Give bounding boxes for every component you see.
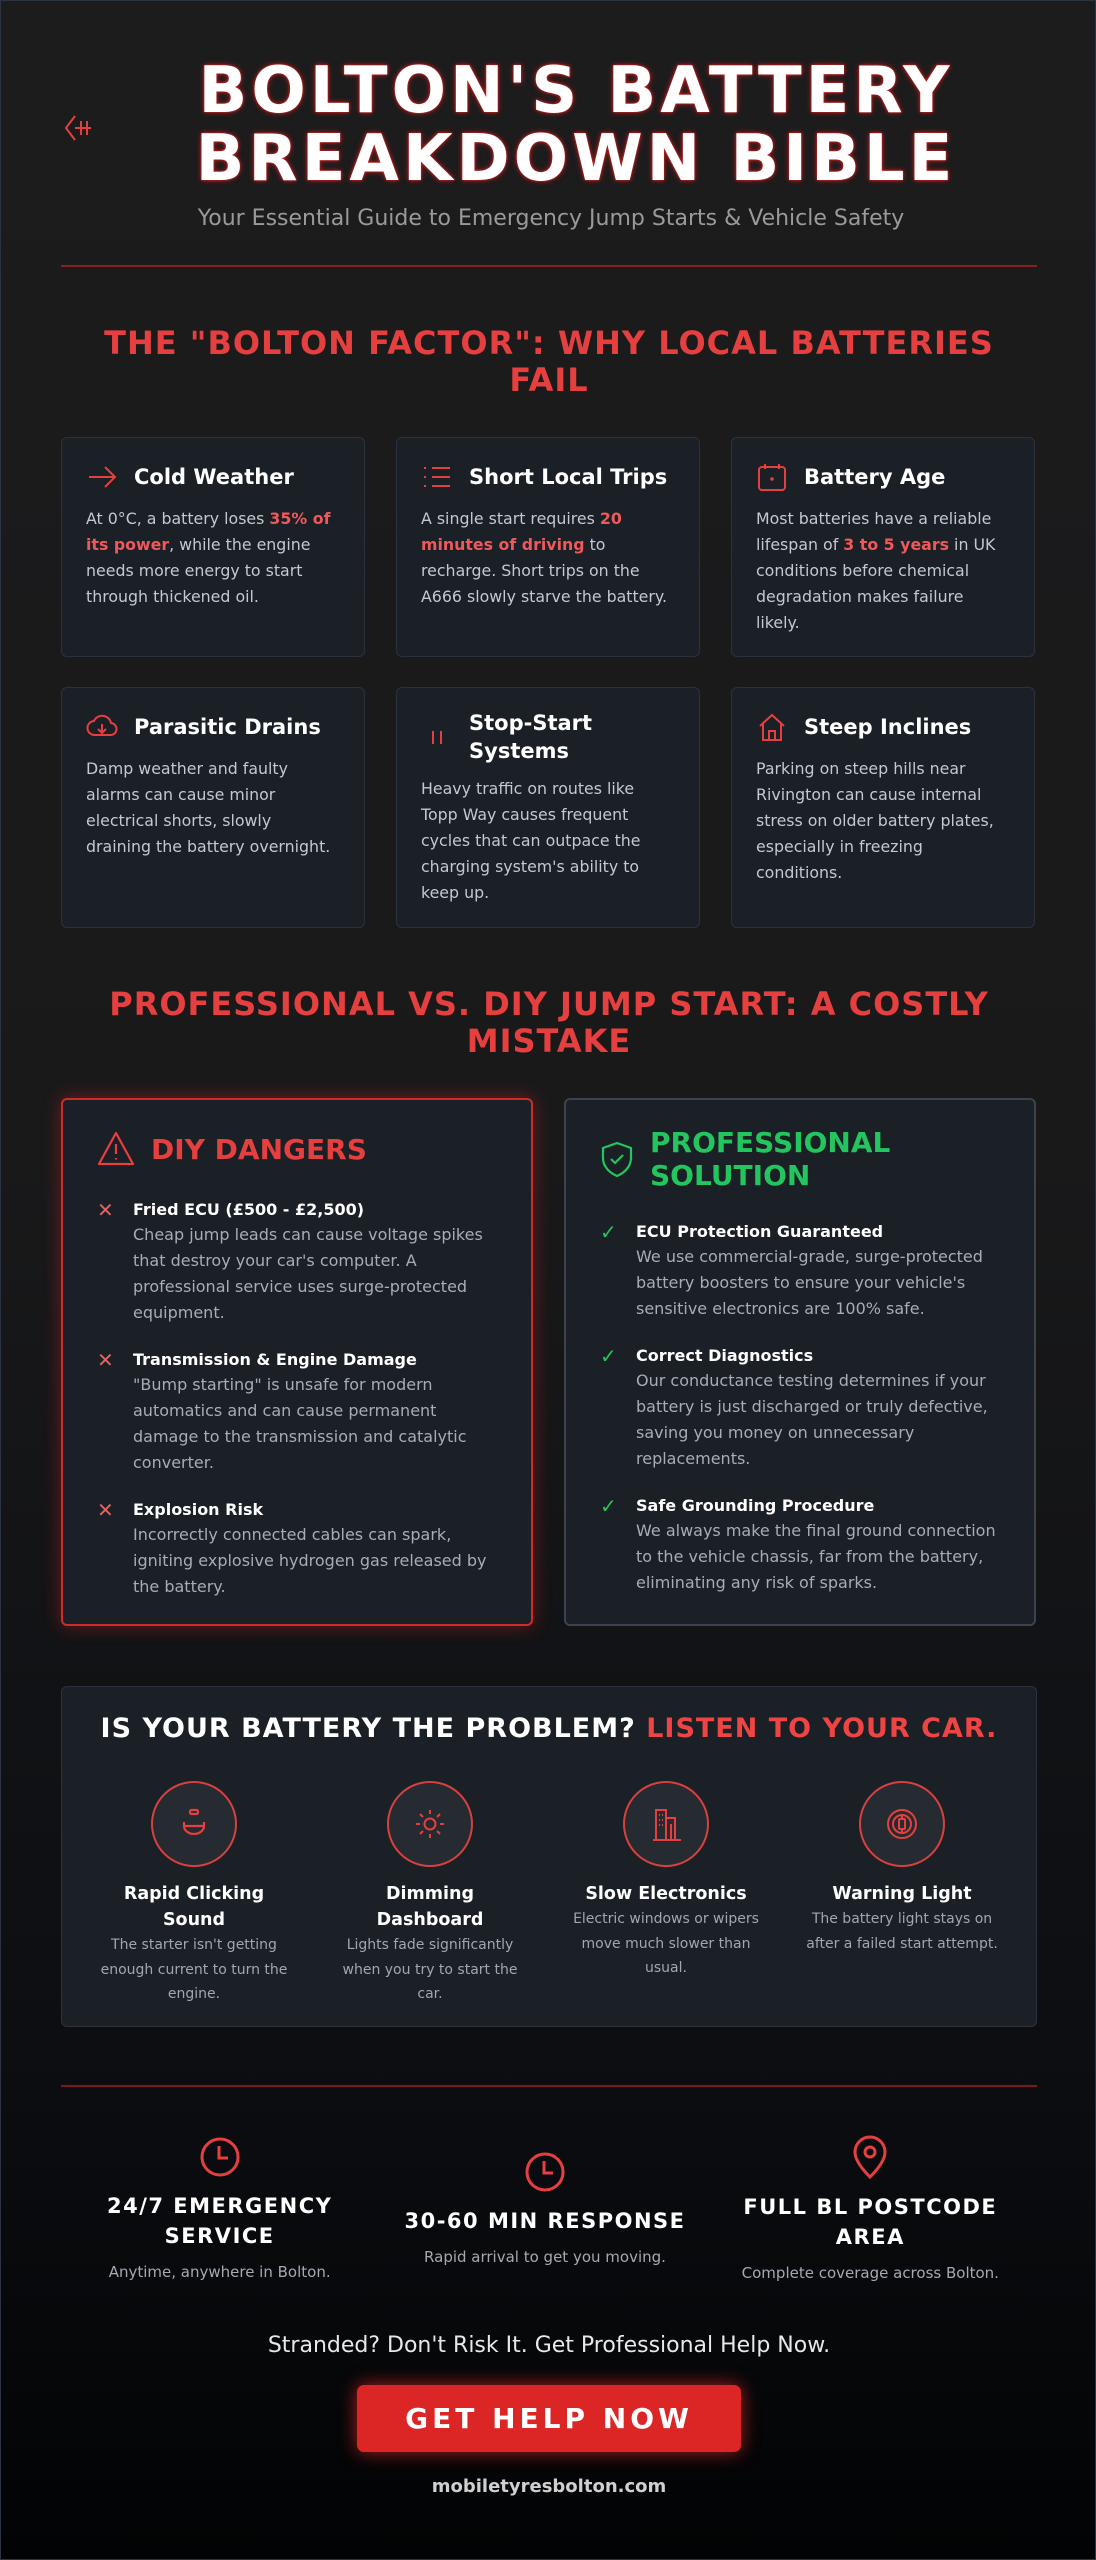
item: ecu protection: ECU Protection Guaranteed (636, 1222, 883, 1241)
symptom: dimming (343, 1781, 517, 2002)
card: battery age: Battery Age (804, 465, 945, 489)
item: ecu protection: ✓ (600, 1220, 617, 1244)
title: BREAKDOWN BIBLE (196, 122, 956, 196)
heading: symptoms: IS YOUR BATTERY THE PROBLEM? LISTEN TO YOUR CAR. (101, 1713, 997, 1744)
card: stop-start: Systems (469, 739, 569, 763)
item: diagnostics: Our conductance testing determines if your battery is just discharged or truly defective, saving you money on unnecessary replacements. (636, 1371, 988, 1468)
feature: postcode: FULL BL POSTCODE (743, 2195, 997, 2219)
card: short trips: Short Local Trips (469, 465, 667, 489)
symptom: warning light: The battery light stays on after a failed start attempt. (806, 1911, 998, 1952)
item: grounding: We always make the final ground connection to the vehicle chassis, far from the battery, eliminating any risk of sparks. (636, 1521, 996, 1592)
symptom: dimming: Dimming (386, 1884, 474, 1904)
item: grounding (600, 1494, 996, 1592)
heading: professional (602, 1126, 890, 1192)
item: explosion: Explosion Risk (133, 1500, 263, 1519)
card: steep inclines: Parking on steep hills near Rivington can cause internal stress on older battery plates, especially in freezing conditions. (756, 759, 994, 882)
symptom: warning light (806, 1781, 998, 1952)
symptom: warning light: Warning Light (832, 1884, 972, 1904)
features row (107, 2136, 999, 2282)
feature: 24/7: Anytime, anywhere in Bolton. (109, 2263, 331, 2281)
symptom: slow electronics: Electric windows or wipers move much slower than usual. (573, 1911, 759, 1976)
card: short trips (396, 437, 700, 657)
item: explosion (97, 1498, 486, 1596)
feature: postcode: AREA (836, 2225, 905, 2249)
card: cold weather: At 0°C, a battery loses 35% of its power, while the engine needs more energy to start through thickened oil. (86, 509, 330, 606)
item: explosion: Incorrectly connected cables can spark, igniting explosive hydrogen gas released by the battery. (133, 1525, 486, 1596)
card: parasitic drains: Parasitic Drains (134, 715, 321, 739)
item: transmission: Transmission & Engine Damage (133, 1350, 417, 1369)
panel: symptoms (61, 1686, 1037, 2027)
cta text: Stranded? Don't Risk It. Get Professional Help Now. (268, 2333, 830, 2358)
symptom: clicking (101, 1781, 287, 2002)
heading: professional: SOLUTION (650, 1159, 810, 1192)
item: explosion: ✕ (97, 1498, 114, 1522)
feature: postcode: Complete coverage across Bolton. (742, 2264, 999, 2282)
heading: diy dangers: DIY DANGERS (151, 1132, 367, 1166)
subtitle: Your Essential Guide to Emergency Jump Starts & Vehicle Safety (198, 206, 904, 231)
item: fried ecu: ✕ (97, 1198, 114, 1222)
item: grounding: Safe Grounding Procedure (636, 1496, 874, 1515)
title: BOLTON'S BATTERY (199, 54, 953, 128)
item: diagnostics: Correct Diagnostics (636, 1346, 813, 1365)
item: fried ecu: Cheap jump leads can cause voltage spikes that destroy your car's computer. A professional service uses surge-protected equipment. (133, 1225, 483, 1322)
symptom: slow electronics (573, 1781, 759, 1976)
card: steep inclines: Steep Inclines (804, 715, 971, 739)
url: mobiletyresbolton.com (432, 2476, 666, 2497)
item: transmission: "Bump starting" is unsafe for modern automatics and can cause permanent damage to the transmission and catalytic converter. (133, 1375, 467, 1472)
feature: response: 30-60 MIN RESPONSE (404, 2209, 685, 2233)
card: steep inclines (731, 687, 1035, 928)
feature: 24/7: SERVICE (165, 2224, 275, 2248)
card: stop-start (396, 687, 700, 928)
card: battery age (731, 437, 1035, 657)
heading: bolton factor: THE "BOLTON FACTOR": WHY LOCAL BATTERIES FAIL (104, 324, 994, 399)
symptom: clicking: Sound (163, 1910, 225, 1930)
symptom: dimming: Dashboard (377, 1910, 483, 1930)
item: grounding: ✓ (600, 1494, 617, 1518)
card: stop-start: Stop-Start (469, 711, 592, 735)
feature: response: Rapid arrival to get you moving. (424, 2248, 666, 2266)
panel: professional solution (564, 1098, 1036, 1626)
feature: response (404, 2152, 685, 2266)
symptom: clicking: Rapid Clicking (124, 1884, 264, 1904)
item: fried ecu: Fried ECU (£500 - £2,500) (133, 1200, 364, 1219)
feature: 24/7 (107, 2138, 332, 2281)
card: cold weather (61, 437, 365, 657)
item: ecu protection: We use commercial-grade, surge-protected battery boosters to ensure your vehicle's sensitive electronics are 100% safe. (636, 1247, 983, 1318)
feature: postcode (742, 2136, 999, 2282)
feature: 24/7: 24/7 EMERGENCY (107, 2194, 332, 2218)
symptom: clicking: The starter isn't getting enough current to turn the engine. (101, 1937, 287, 2002)
item: transmission: ✕ (97, 1348, 114, 1372)
item: ecu protection (600, 1220, 983, 1318)
button: get help now (357, 2385, 741, 2452)
card: stop-start: Heavy traffic on routes like Topp Way causes frequent cycles that can outpace the charging system's ability to keep up. (421, 779, 641, 902)
card: short trips: A single start requires 20 minutes of driving to recharge. Short trips on the A666 slowly starve the battery. (421, 509, 667, 606)
heading: professional vs diy: PROFESSIONAL VS. DIY JUMP START: A COSTLY MISTAKE (109, 985, 989, 1060)
icon: header battery (64, 115, 91, 141)
card: battery age: Most batteries have a reliable lifespan of 3 to 5 years in UK conditions before chemical degradation makes failure likely. (756, 509, 995, 632)
card: parasitic drains: Damp weather and faulty alarms can cause minor electrical shorts, slowly draining the battery overnight. (86, 759, 330, 856)
symptom: slow electronics: Slow Electronics (585, 1884, 747, 1904)
heading: professional: PROFESSIONAL (650, 1126, 890, 1159)
card: cold weather: Cold Weather (134, 465, 294, 489)
button: get help now: GET HELP NOW (405, 2402, 693, 2435)
card: parasitic drains (61, 687, 365, 928)
symptom: dimming: Lights fade significantly when you try to start the car. (343, 1937, 517, 2002)
item: diagnostics: ✓ (600, 1344, 617, 1368)
panel: diy dangers (61, 1098, 533, 1626)
title (196, 54, 956, 196)
